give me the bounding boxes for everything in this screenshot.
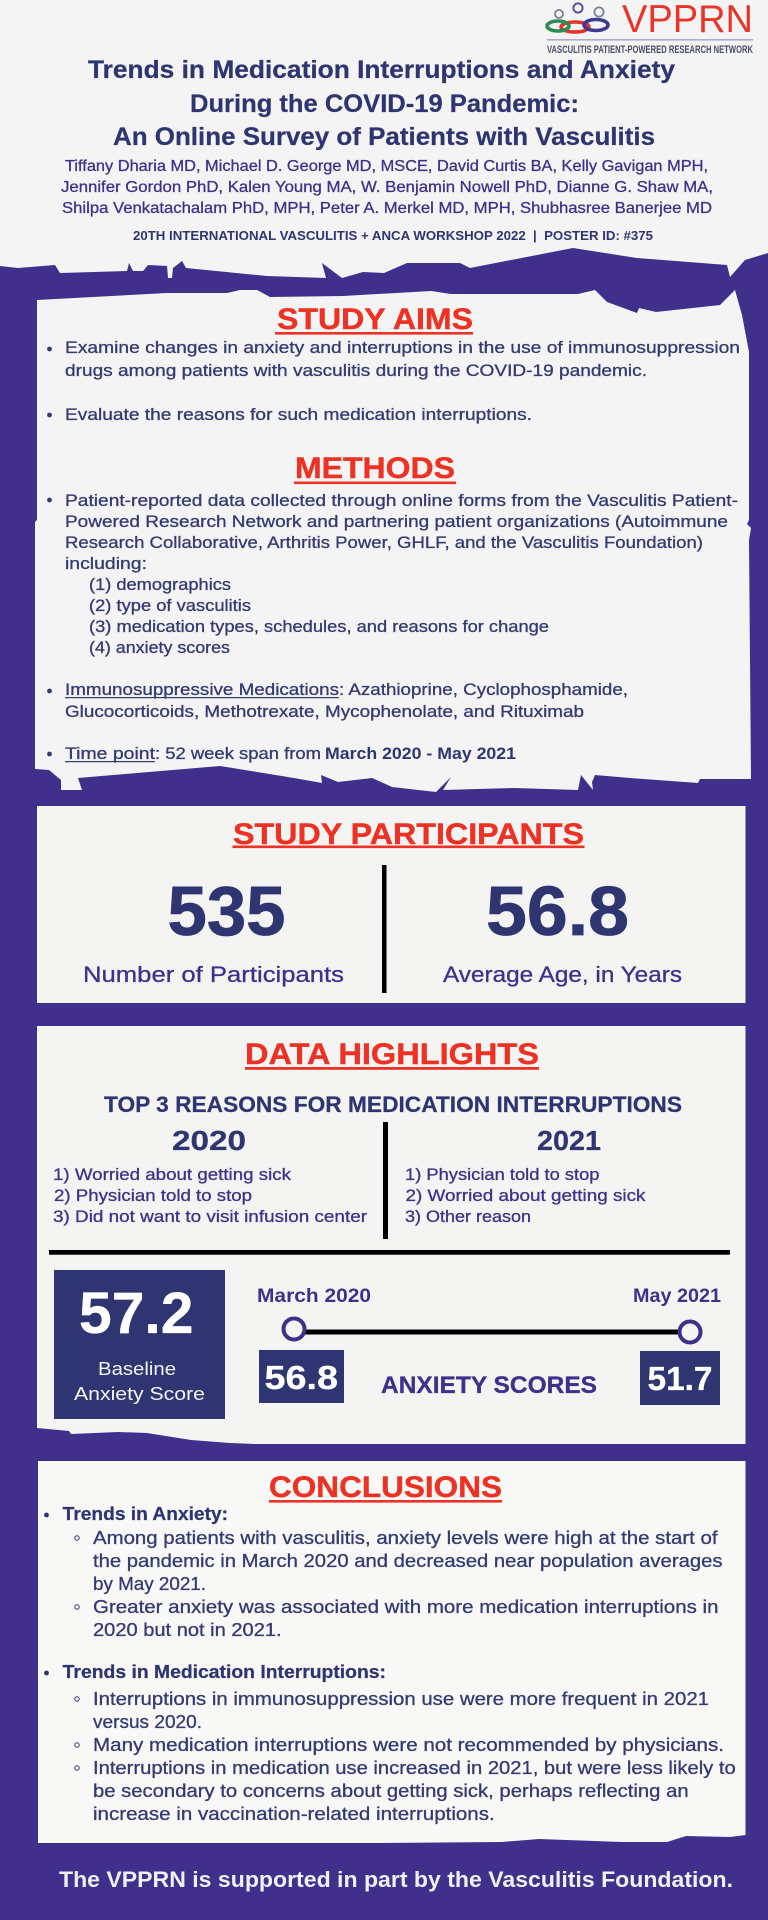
- methods list: (4) anxiety scores: [89, 639, 230, 657]
- heading: data highlights: DATA HIGHLIGHTS: [245, 1038, 539, 1071]
- heading: methods: METHODS: [295, 452, 455, 485]
- authors: Tiffany Dharia MD, Michael D. George MD, MSCE, David Curtis BA, Kelly Gavigan MPH,: [65, 158, 708, 175]
- subheading: top 3 reasons: TOP 3 REASONS FOR MEDICATION INTERRUPTIONS: [104, 1092, 682, 1117]
- stat box: baseline anxiety score: Baseline: [98, 1359, 176, 1379]
- conclusions: trends in medication interruptions: Interruptions in medication use increased in 2021, but were less likely to: [93, 1758, 736, 1778]
- methods list: Powered Research Network and partnering patient organizations (Autoimmune: [65, 513, 728, 531]
- score box: May 2021: [640, 1351, 720, 1405]
- study aims list: drugs among patients with vasculitis during the COVID-19 pandemic.: [65, 362, 647, 380]
- title: During the COVID-19 Pandemic:: [190, 90, 579, 118]
- stat: average age: 56.8: [486, 872, 629, 950]
- conclusions: trends in anxiety: Trends in Anxiety:: [63, 1504, 228, 1524]
- panel: study participants: [37, 806, 746, 1003]
- authors: Shilpa Venkatachalam PhD, MPH, Peter A. Merkel MD, MPH, Shubhasree Banerjee MD: [62, 200, 712, 217]
- methods list: including:: [65, 555, 147, 573]
- score box: March 2020: [259, 1350, 344, 1403]
- conclusions: trends in anxiety: Among patients with vasculitis, anxiety levels were high at the start of: [93, 1528, 719, 1548]
- column: 2021 reasons: [405, 1125, 646, 1226]
- conclusions: trends in anxiety: Greater anxiety was associated with more medication interruptions in: [93, 1597, 718, 1617]
- title: Trends in Medication Interruptions and Anxiety: [88, 56, 675, 84]
- conclusions: trends in medication interruptions: Trends in Medication Interruptions:: [63, 1662, 386, 1682]
- conclusions: trends in anxiety: 2020 but not in 2021.: [93, 1620, 282, 1640]
- methods list: (2) type of vasculitis: [89, 597, 251, 615]
- methods list: Glucocorticoids, Methotrexate, Mycophenolate, and Rituximab: [65, 703, 584, 721]
- label: anxiety scores: ANXIETY SCORES: [381, 1372, 597, 1399]
- stat box: baseline anxiety score: 57.2: [79, 1281, 194, 1346]
- conclusions: trends in medication interruptions: increase in vaccination-related interruptions.: [93, 1804, 495, 1824]
- conclusions: trends in medication interruptions: versus 2020.: [93, 1712, 202, 1732]
- stat: average age: [443, 872, 682, 987]
- methods list: (1) demographics: [89, 576, 231, 594]
- methods list: : 52 week span from: [155, 745, 321, 763]
- panel: data highlights: [37, 1026, 746, 1444]
- conclusions: trends in anxiety: the pandemic in March 2020 and decreased near population averages: [93, 1551, 722, 1571]
- authors: [61, 158, 713, 217]
- column: 2021 reasons: 3) Other reason: [405, 1207, 531, 1226]
- footer: The VPPRN is supported in part by the Vasculitis Foundation.: [59, 1867, 733, 1892]
- study aims list: [47, 339, 740, 424]
- logo: people icon: [547, 3, 608, 32]
- methods list: Immunosuppressive Medications: [65, 681, 339, 699]
- methods list: Research Collaborative, Arthritis Power, GHLF, and the Vasculitis Foundation): [65, 534, 703, 552]
- conclusions: trends in medication interruptions: Interruptions in immunosuppression use were more frequent in 2021: [93, 1689, 709, 1709]
- anxiety timeline: May 2021: [633, 1285, 721, 1307]
- anxiety timeline: March 2020: [257, 1285, 371, 1307]
- authors: Jennifer Gordon PhD, Kalen Young MA, W. Benjamin Nowell PhD, Dianne G. Shaw MA,: [61, 179, 713, 196]
- stat: average age: Average Age, in Years: [443, 962, 682, 987]
- score box: May 2021: 51.7: [648, 1360, 712, 1397]
- stat: participants: [83, 872, 344, 987]
- stat: participants: Number of Participants: [83, 962, 344, 987]
- conclusions: trends in medication interruptions: Many medication interruptions were not recommended by physicians.: [93, 1735, 724, 1755]
- panel: aims and methods: [35, 290, 751, 792]
- anxiety timeline: [257, 1285, 721, 1342]
- title: An Online Survey of Patients with Vasculitis: [113, 123, 655, 151]
- conclusions: trends in medication interruptions: [44, 1662, 736, 1824]
- header band: [0, 0, 768, 278]
- column: 2020 reasons: [53, 1125, 367, 1226]
- column: 2021 reasons: 2) Worried about getting sick: [406, 1186, 646, 1205]
- methods list: (3) medication types, schedules, and reasons for change: [89, 618, 549, 636]
- methods list: [47, 492, 738, 763]
- study aims list: Examine changes in anxiety and interruptions in the use of immunosuppression: [65, 339, 740, 357]
- column: 2021 reasons: 1) Physician told to stop: [405, 1165, 600, 1184]
- column: 2020 reasons: 2020: [172, 1125, 246, 1156]
- title: [88, 56, 675, 151]
- stat: participants: 535: [168, 872, 286, 950]
- methods list: : Azathioprine, Cyclophosphamide,: [339, 681, 628, 699]
- heading: conclusions: CONCLUSIONS: [269, 1471, 502, 1504]
- heading: study aims: STUDY AIMS: [277, 303, 473, 336]
- heading: study participants: STUDY PARTICIPANTS: [233, 818, 584, 851]
- conclusions: trends in anxiety: [44, 1504, 723, 1640]
- logo: [547, 0, 753, 56]
- column: 2021 reasons: 2021: [537, 1125, 601, 1156]
- conclusions: trends in anxiety: by May 2021.: [93, 1574, 206, 1594]
- column: 2020 reasons: 3) Did not want to visit infusion center: [53, 1207, 367, 1226]
- stat box: baseline anxiety score: Anxiety Score: [74, 1384, 205, 1404]
- stat box: baseline anxiety score: [54, 1270, 225, 1419]
- conference line: 20TH INTERNATIONAL VASCULITIS + ANCA WORKSHOP 2022 | POSTER ID: #375: [133, 228, 653, 243]
- methods list: Time point: [65, 745, 155, 763]
- methods list: March 2020 - May 2021: [325, 745, 516, 763]
- conclusions: trends in medication interruptions: be secondary to concerns about getting sick, perhaps reflecting an: [93, 1781, 689, 1801]
- score box: March 2020: 56.8: [264, 1359, 338, 1396]
- panel: conclusions: [38, 1461, 746, 1843]
- study aims list: Evaluate the reasons for such medication interruptions.: [65, 406, 532, 424]
- methods list: Patient-reported data collected through online forms from the Vasculitis Patient-: [65, 492, 738, 510]
- column: 2020 reasons: 2) Physician told to stop: [54, 1186, 252, 1205]
- column: 2020 reasons: 1) Worried about getting sick: [53, 1165, 292, 1184]
